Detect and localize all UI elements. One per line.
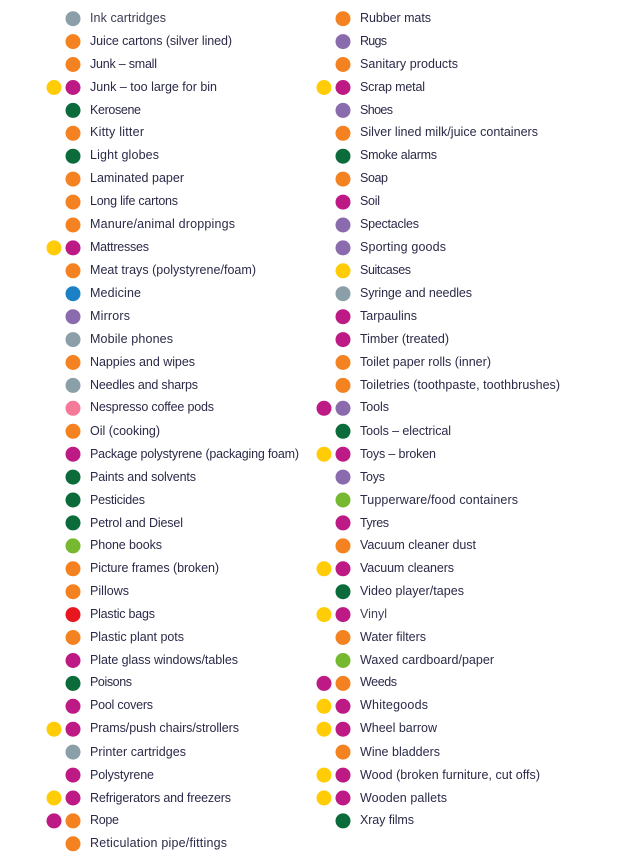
item: Reticulation: Reticulation pipe/fittings (90, 836, 227, 850)
item: Kerosene: Kerosene (90, 103, 141, 117)
item: Smoke alarms (336, 148, 437, 164)
item: Sanitary products: Sanitary products (360, 57, 458, 71)
item: Vacuum cleaners: Vacuum cleaners (360, 561, 454, 575)
item: Weeds (316, 675, 397, 691)
item: Sporting goods: Sporting goods (360, 240, 446, 254)
item: Prams: Prams/push chairs/strollers (90, 721, 239, 735)
item: Rugs (336, 34, 387, 49)
item: Refrigerators: Refrigerators and freezers (90, 791, 231, 805)
item: Nappies: Nappies and wipes (90, 355, 195, 369)
item: Manure: Manure/animal droppings (90, 217, 235, 231)
item: Shoes: Shoes (360, 103, 393, 117)
item: Polystyrene (66, 768, 154, 783)
left column (46, 11, 299, 851)
item: Xray films (336, 813, 414, 828)
item: Rubber mats: Rubber mats (360, 11, 431, 25)
item: Rubber mats (336, 11, 431, 26)
item: Soil: Soil (360, 194, 380, 208)
item: Smoke alarms: Smoke alarms (360, 148, 437, 162)
item: Pool covers (66, 698, 153, 714)
item: Ink cartridges: Ink cartridges (90, 11, 166, 25)
item: Rugs: Rugs (360, 34, 387, 48)
item: Phone books: Phone books (90, 538, 162, 552)
item: Whitegoods (316, 698, 428, 714)
item: Laminated paper: Laminated paper (90, 171, 184, 185)
item: Junk small: Junk – small (90, 57, 157, 71)
item: Tarpaulins: Tarpaulins (360, 309, 417, 323)
item: Mattresses (46, 240, 149, 255)
item: Tools (316, 400, 389, 416)
item: Toys broken: Toys – broken (360, 447, 436, 461)
item: Toiletries: Toiletries (toothpaste, toothbrushes) (360, 378, 560, 392)
item: Pillows (66, 584, 129, 599)
item: Vacuum cleaners (316, 561, 454, 576)
item: Kitty litter: Kitty litter (90, 125, 144, 139)
item: Wood: Wood (broken furniture, cut offs) (360, 768, 540, 782)
item: Waxed cardboard: Waxed cardboard/paper (360, 653, 494, 667)
item: Wine bladders: Wine bladders (360, 745, 440, 759)
item: Wheel barrow (316, 721, 438, 737)
item: Spectacles (336, 217, 419, 232)
item: Oil: Oil (cooking) (90, 424, 160, 438)
item: Spectacles: Spectacles (360, 217, 419, 231)
item: Pesticides (66, 492, 145, 508)
item: Toys (336, 470, 385, 485)
item: Soil (336, 194, 380, 210)
item: Weeds: Weeds (360, 675, 397, 689)
item: Vacuum cleaner dust: Vacuum cleaner dust (360, 538, 477, 552)
item: Soap (336, 171, 388, 187)
item: Video player: Video player/tapes (360, 584, 464, 598)
item: Tupperware: Tupperware/food containers (360, 493, 518, 507)
item: Oil (66, 424, 160, 439)
item: Tyres: Tyres (360, 516, 389, 530)
item: Syringe: Syringe and needles (360, 286, 472, 300)
item: Scrap metal: Scrap metal (360, 80, 425, 94)
right column (316, 11, 560, 828)
item: Rope (46, 813, 119, 828)
item: Paints: Paints and solvents (90, 470, 196, 484)
item: Wheel barrow: Wheel barrow (360, 721, 438, 735)
item: Rope: Rope (90, 813, 119, 827)
item: Mobile phones: Mobile phones (90, 332, 173, 346)
item: Tools: Tools (360, 400, 389, 414)
item: Long life cartons: Long life cartons (90, 194, 178, 208)
item: Toilet paper rolls: Toilet paper rolls (inner) (360, 355, 491, 369)
item: Medicine: Medicine (90, 286, 141, 300)
item: Soap: Soap (360, 171, 388, 185)
item: Tyres (336, 515, 389, 530)
item: Mirrors: Mirrors (90, 309, 130, 323)
item: Toys: Toys (360, 470, 385, 484)
item: Needles: Needles and sharps (90, 378, 198, 392)
item: Juice cartons: Juice cartons (silver lined) (90, 34, 232, 48)
item: Water filters: Water filters (360, 630, 426, 644)
item: Silver lined containers: Silver lined milk/juice containers (360, 125, 538, 139)
item: Kerosene (66, 103, 141, 118)
item: Picture frames: Picture frames (broken) (90, 561, 219, 575)
item: Wooden pallets: Wooden pallets (360, 791, 447, 805)
item: Pool covers: Pool covers (90, 698, 153, 712)
item: Toys broken (316, 447, 436, 462)
item: Mirrors (66, 309, 130, 324)
item: Junk too large: Junk – too large for bin (90, 80, 217, 94)
item: Scrap metal (316, 80, 425, 95)
item: Printer cartridges: Printer cartridges (90, 745, 186, 759)
item: Poisons (66, 675, 132, 691)
item: Meat trays: Meat trays (polystyrene/foam) (90, 263, 256, 277)
item: Suitcases (336, 263, 411, 278)
item: Vinyl (316, 607, 387, 622)
item: Water filters (336, 630, 426, 645)
item: Timber: Timber (treated) (360, 332, 449, 346)
item: Junk small (66, 57, 157, 72)
item: Light globes (66, 148, 159, 164)
item: Plastic bags (66, 607, 155, 622)
item: Package polystyrene: Package polystyrene (packaging foam) (90, 447, 299, 461)
item: Petrol: Petrol and Diesel (90, 516, 183, 530)
item: Xray films: Xray films (360, 813, 414, 827)
item: Wooden pallets (316, 790, 447, 806)
item: Pesticides: Pesticides (90, 493, 145, 507)
item: Polystyrene: Polystyrene (90, 768, 154, 782)
item: Suitcases: Suitcases (360, 263, 411, 277)
item: Poisons: Poisons (90, 675, 132, 689)
item: Junk too large (46, 80, 217, 95)
item: Kitty litter (66, 125, 144, 141)
item: Tarpaulins (336, 309, 417, 324)
item: Plastic bags: Plastic bags (90, 607, 155, 621)
item: Nespresso: Nespresso coffee pods (90, 400, 214, 414)
item: Mattresses: Mattresses (90, 240, 149, 254)
item: Prams (46, 721, 239, 737)
item: Shoes (336, 103, 393, 118)
item: Ink cartridges (66, 11, 166, 26)
item: Whitegoods: Whitegoods (360, 698, 428, 712)
item: Phone books (66, 538, 162, 553)
item: Medicine (66, 286, 141, 301)
item: Pillows: Pillows (90, 584, 129, 598)
item: Plastic plant pots: Plastic plant pots (90, 630, 184, 644)
item: Tools electrical: Tools – electrical (360, 424, 451, 438)
item: Vinyl: Vinyl (360, 607, 387, 621)
item: Plate glass: Plate glass windows/tables (90, 653, 238, 667)
item: Light globes: Light globes (90, 148, 159, 162)
